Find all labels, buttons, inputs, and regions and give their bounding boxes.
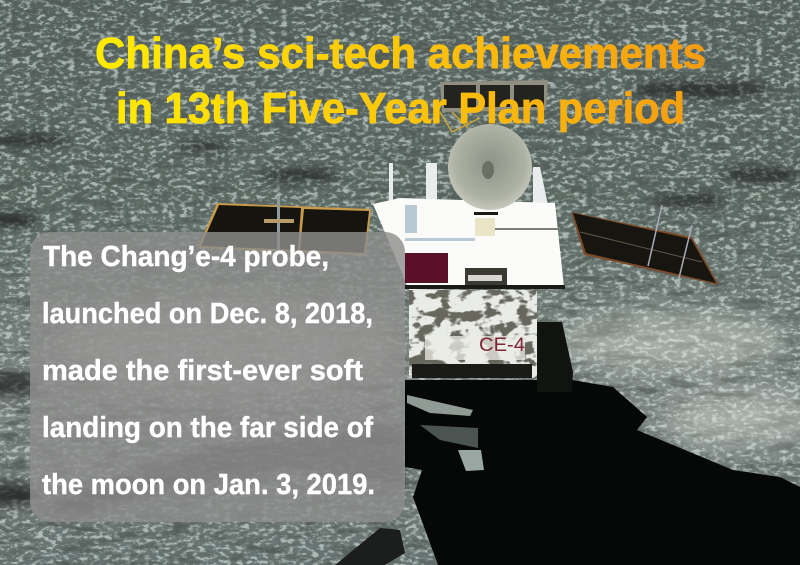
panel: description card	[30, 232, 405, 522]
CE-4 marking: CE-4	[479, 335, 525, 356]
description text	[42, 241, 375, 501]
rover lower body	[405, 268, 565, 378]
right solar panel	[571, 205, 719, 285]
masts	[389, 163, 548, 205]
title	[95, 29, 706, 133]
antenna frame behind dish	[440, 80, 548, 132]
description text: the moon on Jan. 3, 2019.	[42, 469, 375, 501]
description text: made the first-ever soft	[42, 355, 363, 387]
title: in 13th Five-Year Plan period	[116, 84, 685, 133]
shadow of the rover	[40, 380, 800, 565]
dish antenna	[448, 124, 532, 215]
description text: The Chang’e-4 probe,	[43, 241, 329, 273]
description text: launched on Dec. 8, 2018,	[42, 298, 373, 330]
rover deck	[373, 198, 564, 290]
title: China’s sci-tech achievements	[95, 29, 706, 78]
description text: landing on the far side of	[42, 412, 373, 444]
wheel	[537, 322, 573, 392]
flag	[405, 253, 448, 283]
left solar panel	[198, 196, 371, 255]
rover	[198, 80, 719, 392]
